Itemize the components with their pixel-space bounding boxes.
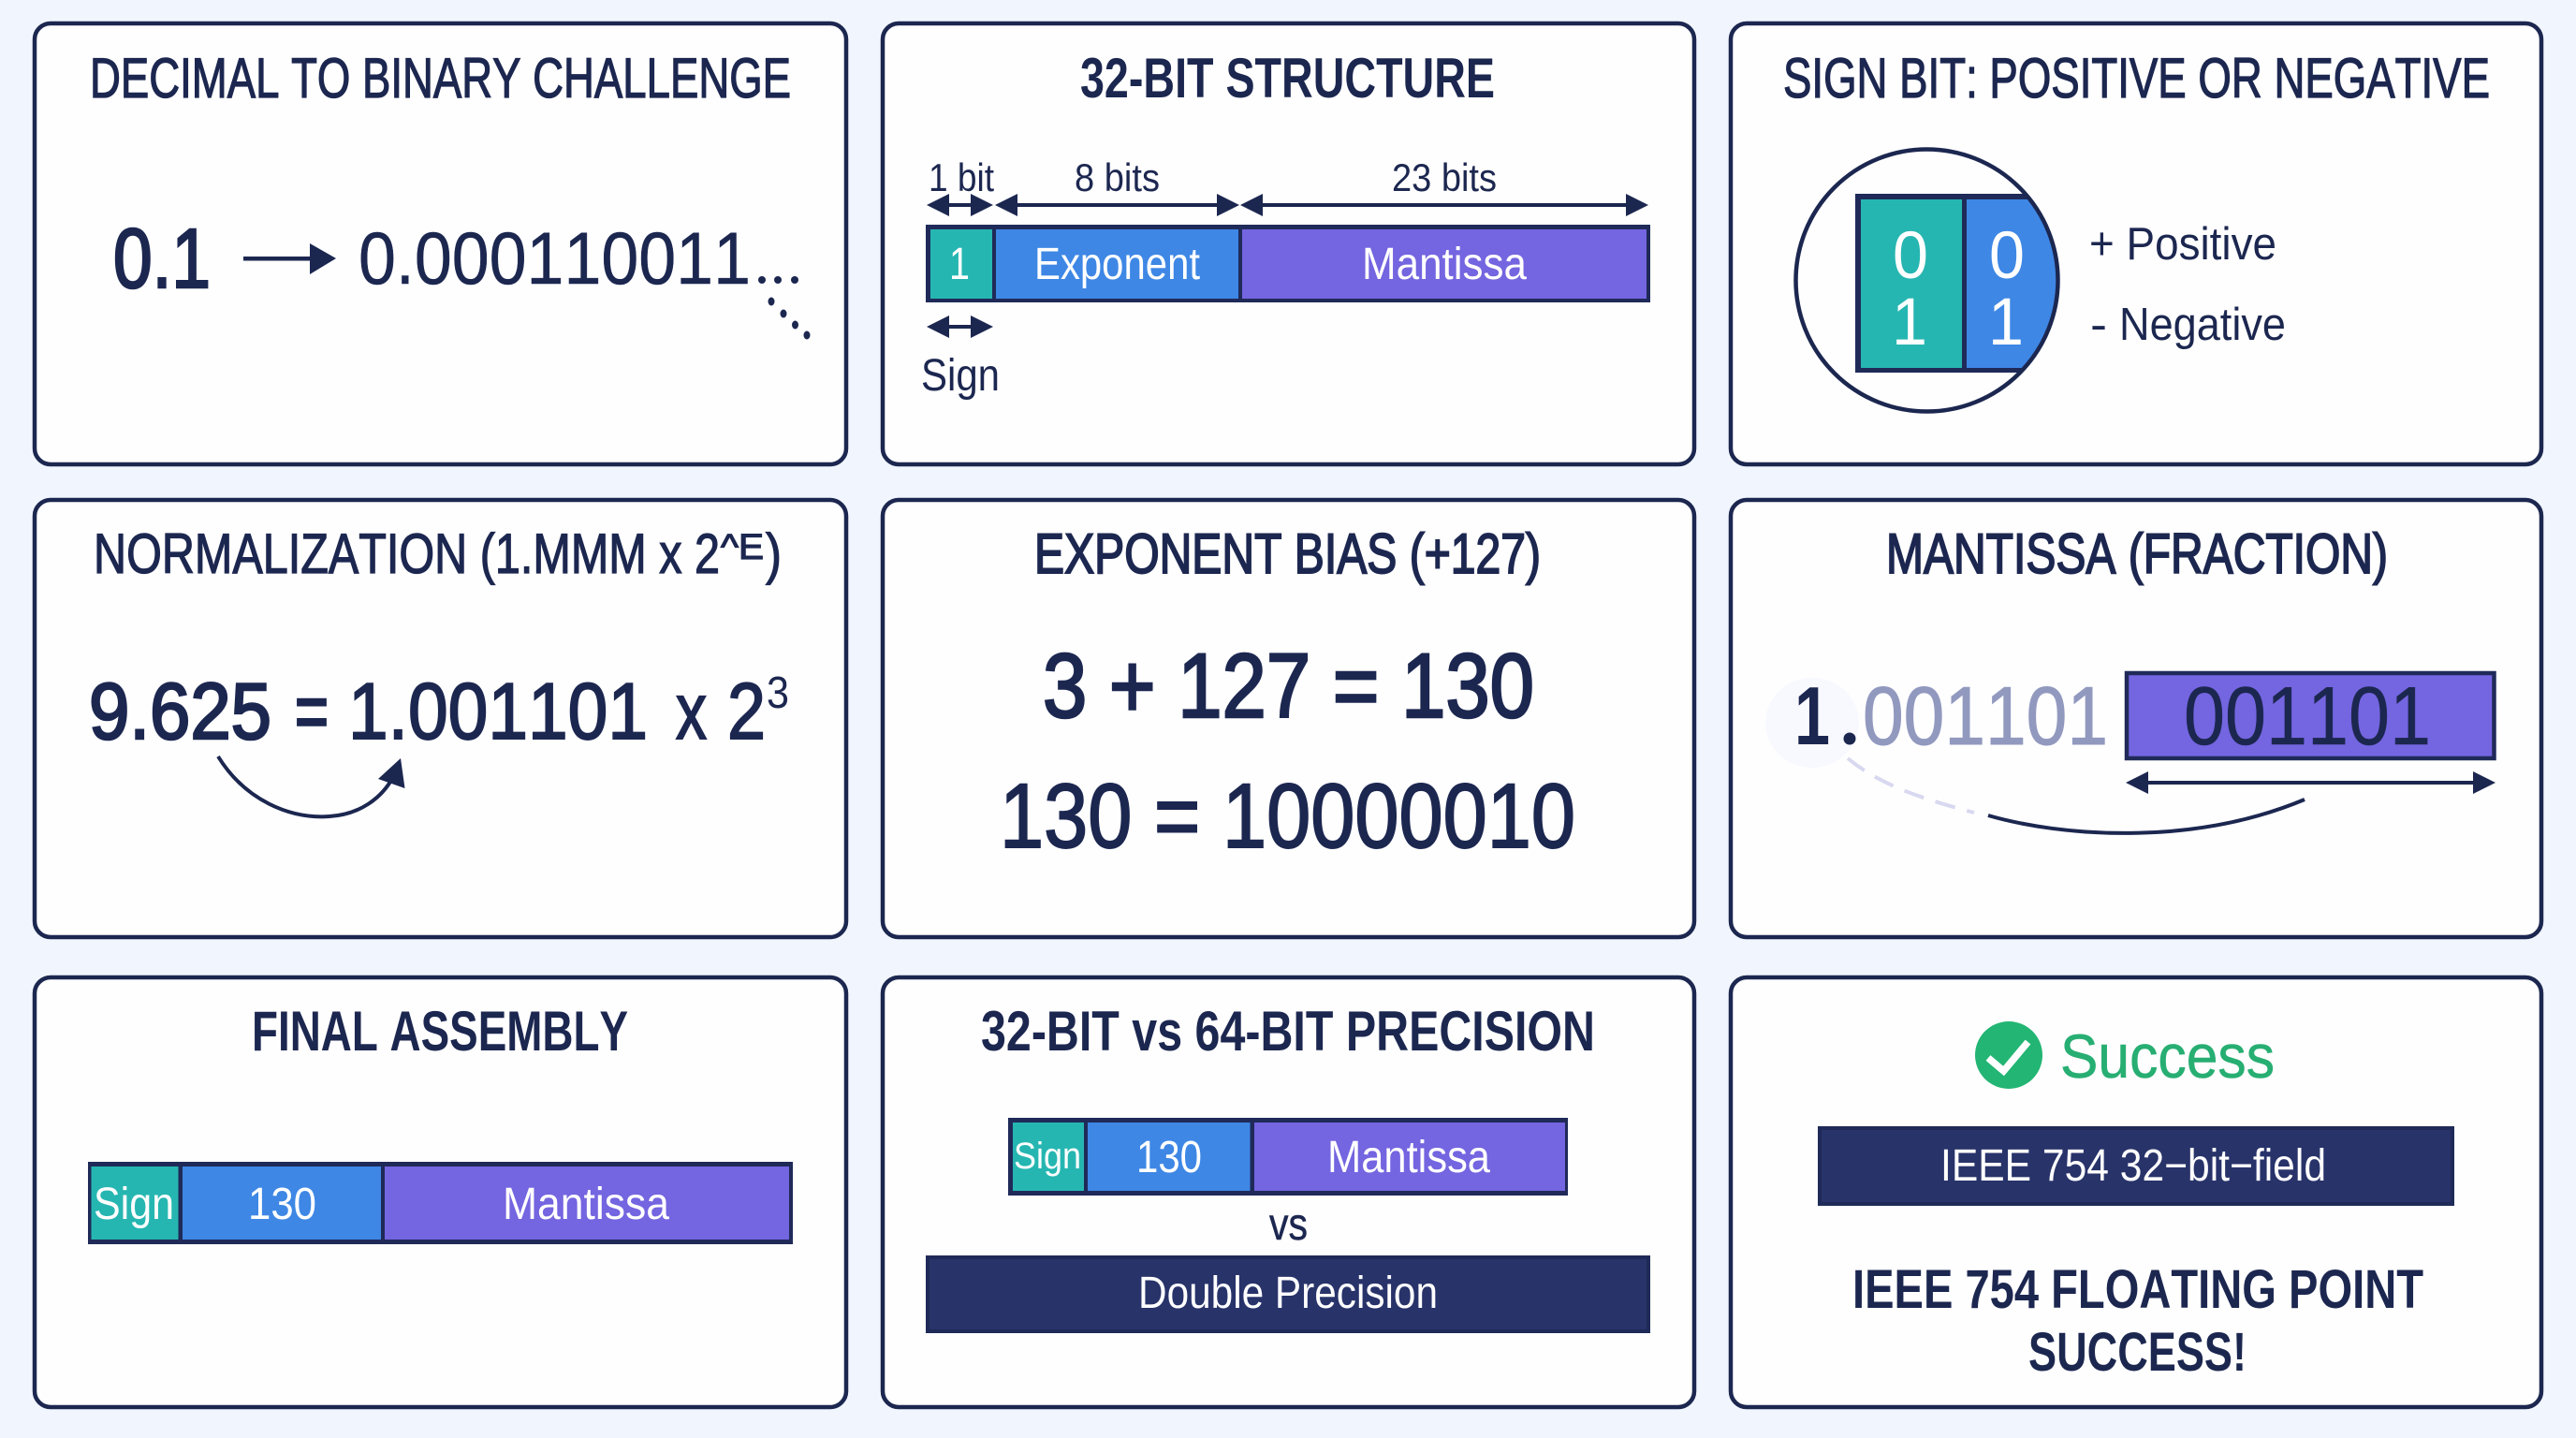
- label: vs: vs: [1269, 1200, 1308, 1250]
- mantissa label: Mantissa: [1362, 240, 1527, 289]
- arrow: mantissa span: [2126, 771, 2496, 794]
- normalization formula: 1.001101: [348, 668, 648, 756]
- sign bit value: 1: [949, 240, 970, 289]
- leading one: 1: [1794, 669, 1830, 762]
- mantissa box: [2127, 669, 2494, 762]
- panel: decimal to binary challenge: [35, 23, 846, 464]
- mantissa label: Mantissa: [1327, 1133, 1490, 1182]
- label: negative: Negative: [2119, 300, 2286, 350]
- panel: final assembly: [35, 977, 846, 1407]
- panel: mantissa: [1731, 500, 2541, 937]
- panel: normalization: [35, 500, 846, 937]
- exponent value: 130: [248, 1180, 316, 1229]
- arrow: decimal to binary: [243, 243, 336, 274]
- sign label: Sign: [94, 1180, 174, 1229]
- panel: sign bit: [1731, 23, 2541, 464]
- single precision bar: [1008, 1118, 1568, 1196]
- arrow: 1 bit span: [927, 194, 993, 216]
- heading: normalization: ^E: [721, 528, 764, 567]
- arrow: curved decimal point shift: [218, 756, 404, 816]
- label: positive: + Positive: [2089, 219, 2276, 270]
- IEEE field label: IEEE 754 32−bit−field: [1940, 1141, 2326, 1191]
- next bit digits: 1: [1988, 286, 2024, 360]
- normalization formula: x: [676, 668, 707, 756]
- normalization formula: [89, 668, 789, 756]
- normalization formula: 9.625: [89, 668, 271, 756]
- sign bit digits: [1892, 219, 1928, 360]
- double precision bar: [928, 1257, 1648, 1331]
- heading: 32-bit structure: 32-BIT STRUCTURE: [1080, 47, 1495, 110]
- panel: exponent bias: [883, 500, 1694, 937]
- label: negative: -: [2090, 300, 2107, 350]
- hidden leading one highlight: [1765, 678, 1859, 768]
- arrow: 23 bits span: [1240, 194, 1648, 216]
- faded fraction digits: 001101: [1863, 669, 2108, 762]
- panel: success: [1731, 977, 2541, 1407]
- assembled bit field: [88, 1162, 793, 1244]
- closing heading: IEEE 754 FLOATING POINT: [1852, 1259, 2423, 1320]
- next bit digits: [1988, 219, 2025, 360]
- heading: normalization: NORMALIZATION (1.MMM x 2: [94, 522, 720, 585]
- label: 8 bits: 8 bits: [1075, 155, 1160, 199]
- equation: binary exponent: 130 = 10000010: [1000, 765, 1575, 867]
- binary value: 0.000110011: [359, 216, 751, 300]
- exponent value: 130: [1136, 1133, 1202, 1182]
- heading: 32-bit vs 64-bit: 32-BIT vs 64-BIT PRECISION: [981, 1000, 1595, 1063]
- label: sign: Sign: [921, 351, 1000, 401]
- closing heading: SUCCESS!: [2028, 1322, 2247, 1383]
- double precision label: Double Precision: [1138, 1269, 1438, 1318]
- heading: decimal to binary challenge: DECIMAL TO BINARY CHALLENGE: [90, 47, 791, 110]
- closing heading: [1852, 1259, 2423, 1383]
- repeating dots: [758, 276, 811, 339]
- panel: 32-bit structure: [883, 23, 1694, 464]
- bit field bar: [926, 225, 1650, 302]
- sign bit digits: 0: [1893, 219, 1928, 293]
- next bit digits: 0: [1989, 219, 2025, 293]
- exponent label: Exponent: [1034, 240, 1200, 289]
- sign bit digits: 1: [1892, 286, 1927, 360]
- label: 1 bit: 1 bit: [929, 155, 994, 199]
- success label: Success: [2060, 1021, 2275, 1091]
- dashed curve: implied one dropped: [1848, 758, 1974, 813]
- normalization formula: =: [295, 668, 329, 756]
- heading: exponent bias: EXPONENT BIAS (+127): [1034, 522, 1541, 585]
- arrow: sign span: [927, 315, 993, 338]
- mantissa digits: 001101: [2184, 669, 2431, 762]
- sign label: Sign: [1014, 1136, 1081, 1177]
- heading: mantissa: MANTISSA (FRACTION): [1886, 522, 2388, 585]
- heading: final assembly: FINAL ASSEMBLY: [252, 1000, 628, 1063]
- solid curve: fraction carried: [1988, 800, 2305, 833]
- label: 23 bits: 23 bits: [1392, 155, 1497, 199]
- IEEE field bar: [1820, 1128, 2452, 1204]
- heading: normalization: ): [766, 522, 782, 585]
- equation: biased exponent: 3 + 127 = 130: [1043, 635, 1534, 737]
- arrow: 8 bits span: [995, 194, 1239, 216]
- normalization formula: 2: [727, 668, 766, 756]
- icon: green check: [1975, 1021, 2042, 1089]
- decimal value: 0.1: [113, 213, 211, 306]
- decimal point: [1844, 732, 1855, 745]
- mantissa label: Mantissa: [503, 1180, 669, 1229]
- normalization formula: 3: [767, 668, 789, 718]
- panel: 32-bit vs 64-bit: [883, 977, 1694, 1407]
- magnifier circle with bits: [1795, 150, 2071, 412]
